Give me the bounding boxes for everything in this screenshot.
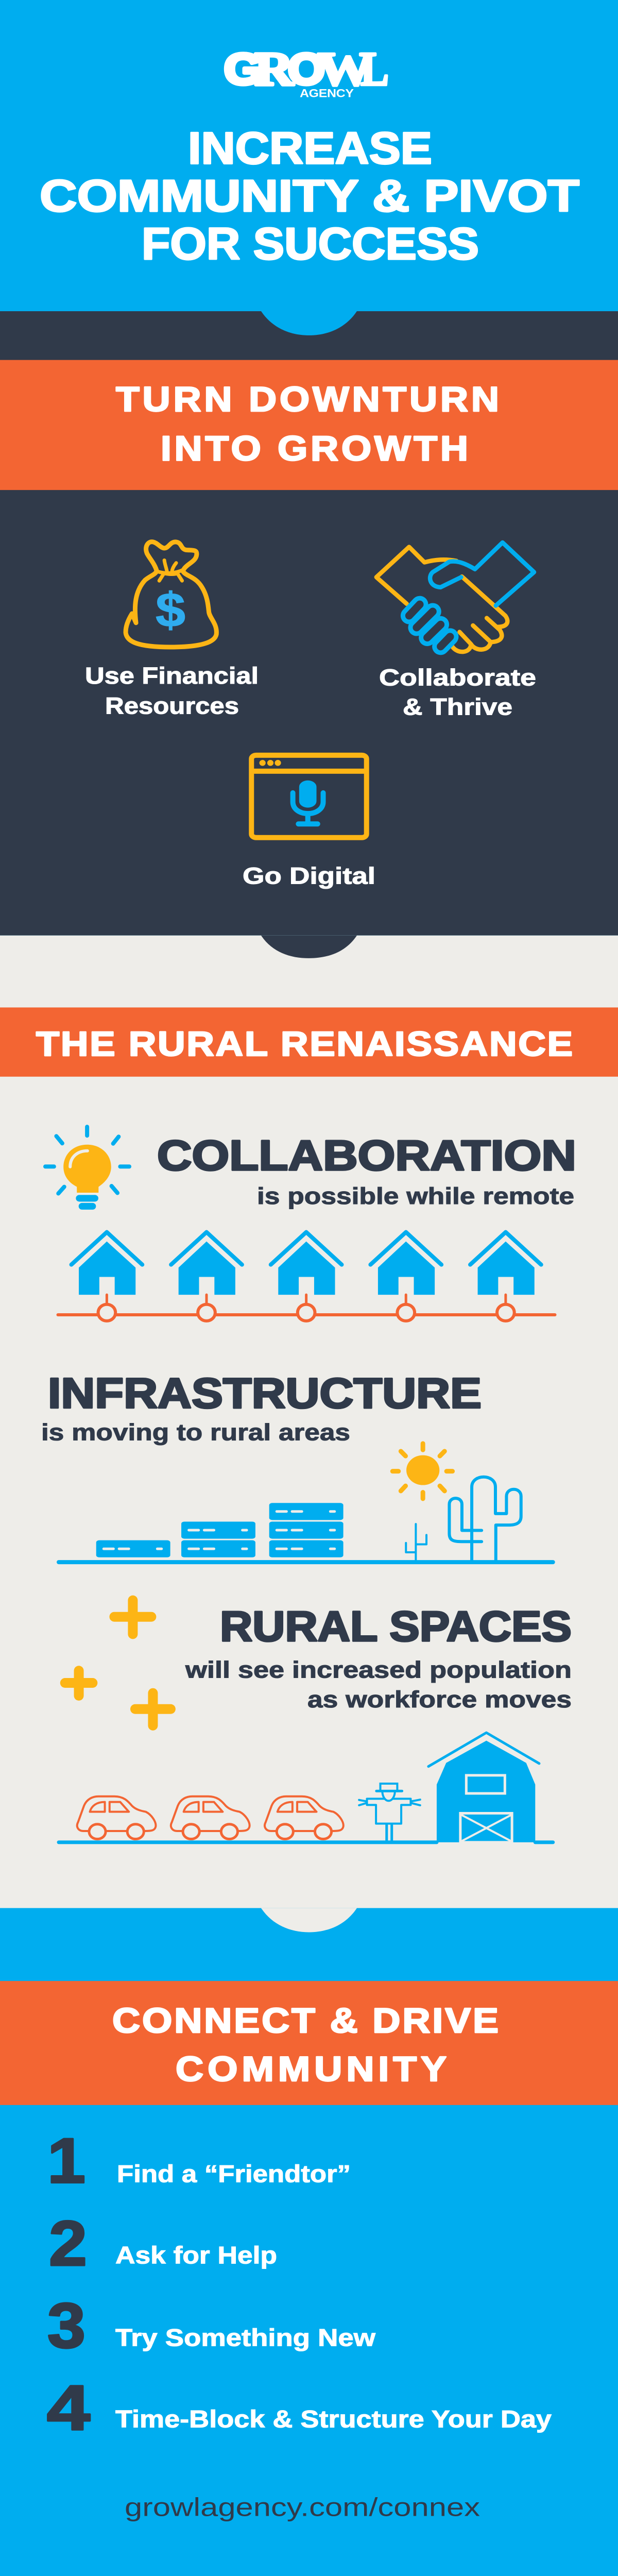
icon: plus signs	[65, 1600, 170, 1725]
icon: large cactus	[449, 1477, 521, 1560]
label: use financial resources: Resources	[105, 693, 239, 719]
subheading: rural spaces	[185, 1657, 572, 1713]
panel: the rural renaissance	[0, 936, 618, 1908]
icon: money bag	[126, 542, 216, 647]
list item 2: Ask for Help	[115, 2242, 277, 2269]
icon: sun	[392, 1444, 453, 1499]
logo: Growl Agency: R	[254, 43, 295, 96]
list item 3	[47, 2290, 376, 2361]
icon: dollar sign: $	[156, 583, 185, 637]
label: collaborate and thrive: Collaborate	[379, 665, 536, 691]
label: use financial resources: Use Financial	[85, 663, 259, 689]
icon: small cactus	[406, 1524, 426, 1560]
list item 4: Time-Block & Structure Your Day	[115, 2406, 552, 2433]
title	[40, 123, 579, 269]
title: INCREASE	[188, 123, 432, 173]
illustration: cars, scarecrow and barn	[59, 1733, 553, 1842]
notch: rural panel tab	[261, 1908, 357, 1932]
section header band: INTO GROWTH	[161, 429, 468, 468]
list item 1	[47, 2125, 351, 2196]
list item 1: Find a “Friendtor”	[117, 2161, 351, 2188]
logo: Growl Agency: W	[317, 43, 373, 96]
list item 2: 2	[49, 2208, 87, 2279]
panel: hero header	[0, 0, 618, 311]
heading: infrastructure: INFRASTRUCTURE	[48, 1369, 482, 1417]
label: go digital: Go Digital	[243, 863, 375, 889]
notch: dark panel tab	[261, 936, 357, 958]
list item 3: 3	[47, 2290, 85, 2361]
section header band	[0, 1007, 618, 1077]
logo: Growl Agency: G	[224, 44, 262, 93]
heading: collaboration: COLLABORATION	[157, 1131, 576, 1179]
subheading: rural spaces: as workforce moves	[307, 1687, 572, 1713]
illustration: connected houses	[58, 1232, 555, 1321]
logo: Growl Agency: L	[360, 43, 389, 96]
icon: light bulb	[45, 1127, 129, 1206]
title: FOR SUCCESS	[142, 218, 479, 269]
list item 4	[47, 2372, 552, 2444]
section header band: THE RURAL RENAISSANCE	[36, 1025, 573, 1063]
illustration: servers and desert	[59, 1444, 553, 1562]
label: use financial resources	[85, 663, 259, 719]
subheading: collaboration: is possible while remote	[257, 1183, 574, 1209]
subheading: infrastructure: is moving to rural areas	[41, 1420, 350, 1446]
label: collaborate and thrive: & Thrive	[403, 694, 512, 720]
server stacks	[96, 1503, 344, 1557]
icon: browser window with microphone	[251, 755, 367, 838]
logo: Growl Agency: O	[288, 44, 325, 93]
list item 2	[49, 2208, 277, 2279]
icon: scarecrow	[359, 1784, 420, 1841]
list item 4: 4	[47, 2372, 90, 2444]
heading: rural spaces: RURAL SPACES	[220, 1602, 572, 1650]
icon: handshake	[376, 543, 534, 652]
icon: barn	[428, 1733, 539, 1842]
logo: Growl Agency	[224, 43, 389, 100]
section header band	[0, 1981, 618, 2105]
list item 3: Try Something New	[115, 2325, 376, 2351]
subheading: rural spaces: will see increased population	[185, 1657, 572, 1683]
house row	[72, 1232, 541, 1321]
cars	[77, 1797, 344, 1839]
section header band	[0, 360, 618, 490]
panel: connect and drive community	[0, 1908, 618, 2576]
label: collaborate and thrive	[379, 665, 536, 720]
notch: hero tab	[261, 311, 357, 335]
ground line	[59, 1840, 553, 1844]
section header band: CONNECT & DRIVE	[112, 2002, 499, 2040]
panel: turn downturn into growth	[0, 311, 618, 936]
logo: Growl Agency: AGENCY	[300, 87, 354, 100]
title: COMMUNITY & PIVOT	[40, 171, 579, 221]
footer url: growlagency.com/connex	[125, 2493, 480, 2522]
section header band: COMMUNITY	[176, 2049, 447, 2089]
list item 1: 1	[47, 2125, 85, 2196]
section header band: TURN DOWNTURN	[116, 380, 499, 419]
